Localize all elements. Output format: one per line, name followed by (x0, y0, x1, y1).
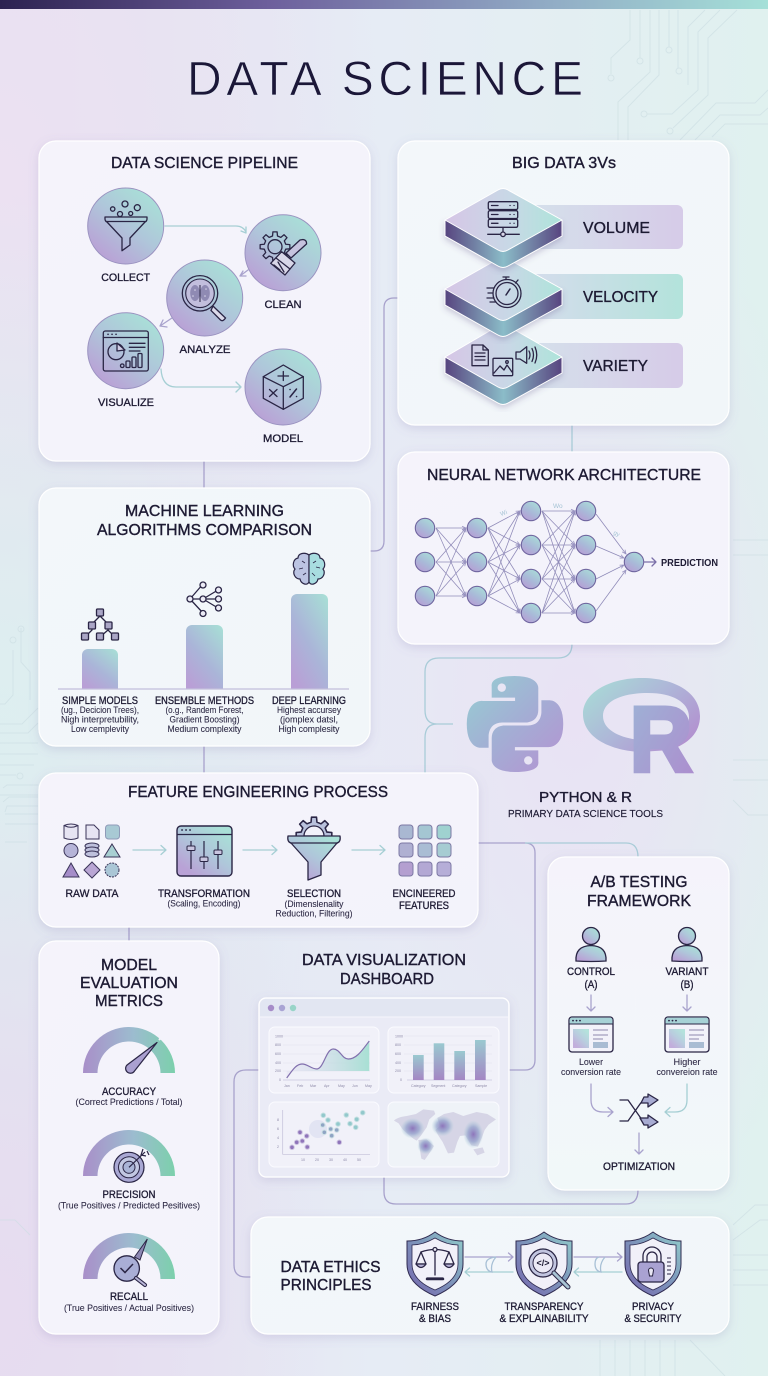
arrow: transformation to selection (243, 846, 277, 854)
chart: scatter: 2 (277, 1145, 279, 1149)
icon: gear and brush (260, 232, 307, 275)
heading: model evaluation: METRICS (95, 993, 163, 1010)
chart: line: Feb (297, 1084, 303, 1088)
heading: A/B testing: FRAMEWORK (587, 893, 691, 910)
gauge: recall (64, 1233, 194, 1314)
chart: line: Apr (324, 1084, 330, 1088)
chart: scatter: 6 (277, 1127, 279, 1131)
arrow down (683, 995, 691, 1011)
tools caption (508, 789, 663, 820)
label: CLEAN (264, 299, 302, 311)
icon: server (488, 202, 519, 237)
icon: person (576, 928, 606, 962)
tools caption: PRIMARY DATA SCIENCE TOOLS (508, 808, 663, 820)
chart: line: Mar (310, 1084, 317, 1088)
arrow down (587, 995, 595, 1011)
icon: doc image sound (472, 345, 537, 376)
shield: transparency (500, 1232, 589, 1325)
chart: scatter: 20 (315, 1158, 319, 1162)
labels: feature steps: FEATURES (399, 900, 449, 912)
column labels: deep learning: Highest accursey (277, 705, 341, 716)
labels: & BIAS (419, 1313, 451, 1325)
panel: feature engineering (39, 773, 478, 927)
icon: gear funnel (288, 817, 340, 880)
label: CONTROL (567, 966, 615, 978)
chart: line: 200 (275, 1069, 281, 1073)
chart: line: 600 (275, 1052, 281, 1056)
icon: cube with math symbols (263, 365, 303, 409)
chart: bars: Category (452, 1084, 467, 1088)
bar chart (58, 594, 349, 689)
network weight labels: Wo (553, 503, 563, 510)
icon: decision tree (82, 609, 118, 640)
heading: machine learning (97, 503, 312, 539)
gauge: precision: (True Positives / Predicted Pesitives) (58, 1200, 200, 1212)
heading: model evaluation (80, 957, 178, 1010)
heading: data visualization dashboard (302, 952, 466, 988)
chart: line: Jun (352, 1084, 358, 1088)
column labels: deep learning: (jomplex datsl, (280, 714, 338, 726)
step: visualize (88, 313, 164, 409)
label: MODEL (263, 433, 303, 445)
heading: model evaluation: MODEL (101, 957, 157, 974)
heading: model evaluation: EVALUATION (80, 975, 178, 992)
labels: feature steps (66, 888, 456, 920)
heading: big data: BIG DATA 3Vs (512, 155, 616, 172)
icon: shuffle (620, 1094, 658, 1128)
network connections (436, 511, 626, 613)
chart: line: May (338, 1084, 345, 1088)
labels (411, 1301, 459, 1325)
panel: machine learning comparison (39, 488, 370, 746)
labels: PRIVACY (632, 1301, 675, 1313)
icon: engineered feature grid (399, 825, 451, 876)
gauge: accuracy: ACCURACY (102, 1086, 157, 1098)
icon: ensemble network (187, 582, 222, 616)
icon: magnifier with brain (182, 276, 226, 321)
layer: volume (445, 188, 562, 268)
chart: scatter: 40 (343, 1158, 347, 1162)
arrow: raw data to transformation (133, 846, 166, 854)
heading: A/B testing (587, 874, 691, 910)
chart: scatter (269, 1102, 379, 1167)
tools: python and R (467, 676, 700, 820)
icon group: raw data shapes (63, 824, 120, 878)
labels: feature steps: ENCINEERED (392, 888, 456, 900)
icon: sliders window (177, 826, 232, 876)
icon: stopwatch (487, 277, 521, 308)
result text (561, 1057, 621, 1078)
icon: magnifier with code: </> (536, 1258, 550, 1268)
column labels: simple models: SIMPLE MODELS (62, 695, 138, 707)
label: (B) (680, 979, 694, 991)
panel: model evaluation metrics (39, 941, 219, 1334)
chart: bars: 1000 (395, 1034, 403, 1038)
panel: data science pipeline (39, 141, 370, 461)
heading: data visualization dashboard: DATA VISUALIZATION (302, 952, 466, 969)
label bar: volume (530, 205, 683, 249)
label bar: volume: VOLUME (583, 220, 650, 237)
gauge: precision (58, 1130, 200, 1212)
step: analyze (167, 260, 243, 356)
step: clean (245, 215, 321, 311)
label: (A) (584, 979, 598, 991)
labels (500, 1301, 589, 1325)
arrow to optimization (635, 1133, 643, 1154)
column labels: simple models: Nigh interpretubility, (61, 714, 139, 726)
chart: line: 400 (275, 1061, 281, 1065)
labels: feature steps: (Scaling, Encoding) (168, 898, 240, 910)
chart: scatter: 4 (277, 1136, 279, 1140)
result text: Lower (579, 1057, 603, 1068)
icon: person (672, 928, 702, 962)
pipeline arrows (160, 226, 248, 392)
top gradient bar (0, 0, 768, 9)
column: control (561, 928, 621, 1078)
prediction label: PREDICTION (661, 558, 718, 569)
step: collect (88, 188, 164, 284)
icon: page window (665, 1017, 709, 1052)
chart: world heat map (388, 1102, 499, 1167)
column labels: ensemble methods: Medium complexity (168, 724, 242, 735)
chart: bars (388, 1027, 499, 1093)
label bar: variety: VARIETY (583, 358, 648, 375)
chart: line: Jan (284, 1084, 290, 1088)
shield: fairness (407, 1232, 463, 1325)
heading: A/B testing: A/B TESTING (590, 874, 688, 891)
chart: scatter: 8 (277, 1118, 279, 1122)
dashboard window (259, 998, 509, 1177)
chart: scatter: 10 (301, 1158, 305, 1162)
step: model (245, 349, 321, 445)
heading: neural network: NEURAL NETWORK ARCHITECTURE (427, 467, 701, 484)
chart: bars: 400 (395, 1061, 401, 1065)
icon: R logo: R (630, 689, 692, 791)
icon: python logo (467, 676, 563, 772)
chart: scatter: 50 (357, 1158, 361, 1162)
arrow: selection to engineered features (352, 846, 385, 854)
labels: feature steps: (Dimenslenality (284, 899, 344, 910)
icon: scales (416, 1248, 454, 1279)
network weight labels: gy (612, 530, 620, 538)
label bar: velocity: VELOCITY (583, 289, 658, 306)
result text: Higher (674, 1057, 700, 1068)
chart: bars: Sample (475, 1084, 487, 1088)
shield: privacy (624, 1232, 682, 1325)
gauge: recall: RECALL (110, 1291, 148, 1303)
heading: data ethics (280, 1259, 380, 1294)
layer: variety (445, 324, 562, 404)
labels: FAIRNESS (411, 1301, 459, 1313)
column labels: ensemble methods: (o.g., Randem Forest, (166, 705, 244, 716)
connector lines (129, 298, 638, 1277)
gauge: recall: (True Positives / Actual Positives) (64, 1303, 194, 1314)
icon: page window (569, 1017, 613, 1052)
column labels: simple models: (ug., Decicion Trees), (61, 705, 139, 716)
icon: brain (293, 553, 325, 584)
label: VISUALIZE (98, 397, 154, 409)
column labels: deep learning: DEEP LEARNING (272, 695, 346, 707)
column labels: ensemble methods: Gradient Boosting) (170, 714, 240, 726)
chart: bars: 200 (395, 1069, 401, 1073)
gauge: precision: PRECISION (102, 1189, 156, 1201)
label bar: variety (530, 343, 683, 388)
label: ANALYZE (180, 344, 230, 356)
heading: pipeline: DATA SCIENCE PIPELINE (111, 155, 298, 172)
result text: conversion rate (561, 1067, 621, 1078)
network weight labels (500, 503, 620, 538)
labels: feature steps: SELECTION (287, 888, 341, 900)
labels: & SECURITY (624, 1313, 682, 1325)
heading: machine learning: MACHINE LEARNING (125, 503, 284, 520)
chart: line: 0 (279, 1078, 281, 1082)
result text (656, 1057, 718, 1078)
panel: data ethics principles (251, 1217, 729, 1334)
result text: convereion rate (656, 1067, 718, 1078)
column labels: ensemble methods (155, 695, 254, 735)
panel: neural network (398, 452, 729, 644)
chart: bars: 0 (400, 1078, 402, 1082)
labels: feature steps: Reduction, Filtering) (276, 908, 352, 920)
column: variant (656, 928, 718, 1078)
column labels: ensemble methods: ENSEMBLE METHODS (155, 695, 254, 707)
icon: dashboard window (103, 331, 148, 371)
network nodes (415, 501, 644, 623)
chart: line: May (365, 1084, 372, 1088)
heading: machine learning: ALGORITHMS COMPARISON (97, 522, 312, 539)
column labels: simple models: Low cemplevity (71, 724, 129, 735)
panel: A/B testing framework (548, 857, 729, 1190)
flow arrows to optimization (591, 1084, 687, 1116)
heading: data visualization dashboard: DASHBOARD (340, 971, 434, 988)
labels: feature steps: TRANSFORMATION (158, 888, 250, 900)
label: optimization: OPTIMIZATION (603, 1161, 675, 1173)
labels (624, 1301, 682, 1325)
title: DATA SCIENCE (187, 53, 583, 106)
labels: & EXPLAINABILITY (500, 1313, 589, 1325)
links between shields (465, 1253, 622, 1276)
chart: bars: Category (411, 1084, 426, 1088)
chart: bars: 600 (395, 1052, 401, 1056)
label: VARIANT (666, 966, 709, 978)
gauge: accuracy (76, 1027, 182, 1108)
heading: feature engineering: FEATURE ENGINEERING PROCESS (128, 784, 388, 801)
chart: line: 1000 (275, 1034, 283, 1038)
chart: bars: Segment (431, 1084, 445, 1088)
layer: velocity (445, 258, 562, 336)
labels: TRANSPARENCY (504, 1301, 584, 1313)
prediction output arrow (644, 558, 656, 566)
tools caption: PYTHON & R (539, 789, 632, 806)
column labels: deep learning: High complesity (278, 724, 340, 735)
icon: R logo (583, 678, 700, 791)
label (666, 966, 709, 991)
window dots (268, 1005, 296, 1011)
chart: scatter: 30 (329, 1158, 333, 1162)
labels: feature steps: RAW DATA (66, 888, 119, 900)
icon: padlock (638, 1247, 671, 1282)
panel: big data 3Vs (398, 141, 729, 425)
label: COLLECT (101, 272, 150, 284)
heading: data ethics: DATA ETHICS (280, 1259, 380, 1276)
column labels: deep learning (272, 695, 346, 735)
icon: funnel (105, 201, 147, 251)
chart: bars: 800 (395, 1043, 401, 1047)
gauge: accuracy: (Correct Predictions / Total) (76, 1097, 182, 1108)
heading: data ethics: PRINCIPLES (280, 1277, 372, 1294)
column labels: simple models (61, 695, 139, 735)
network weight labels: Wi (500, 510, 508, 518)
chart: line: 800 (275, 1043, 281, 1047)
chart: line (269, 1027, 379, 1093)
label (567, 966, 615, 991)
label bar: velocity (530, 274, 683, 319)
